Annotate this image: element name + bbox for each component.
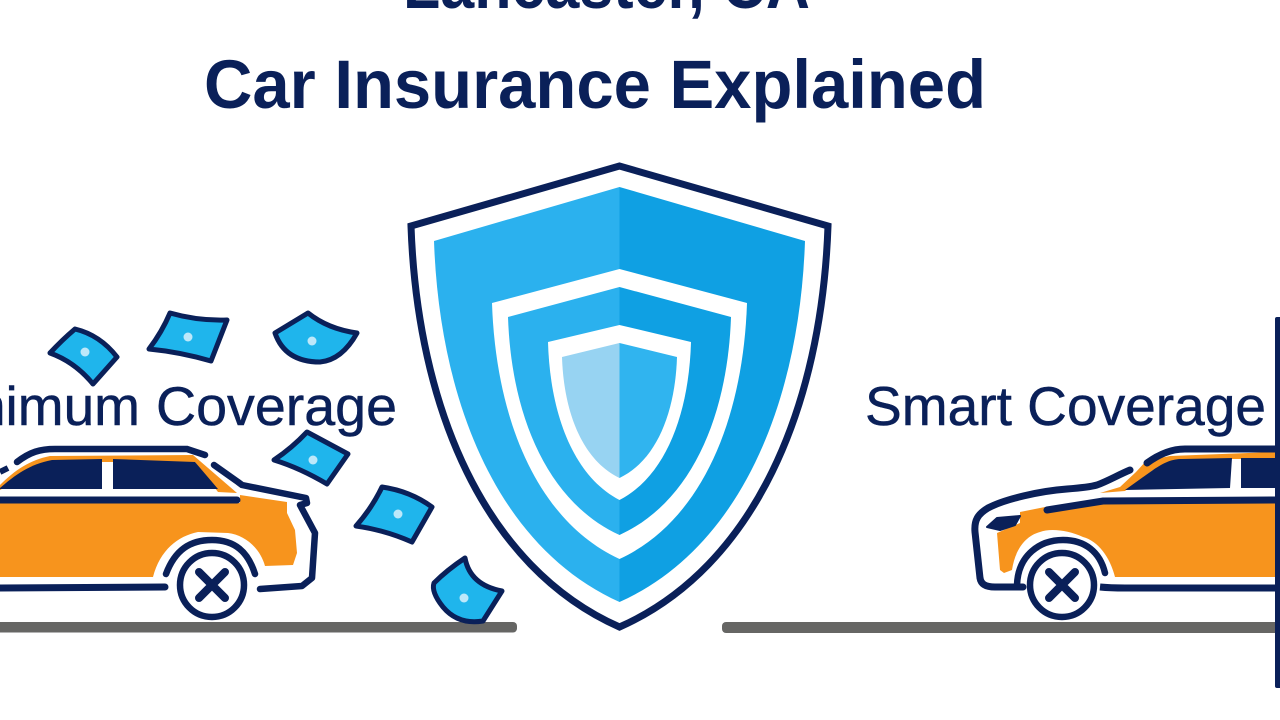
title: main heading: Car Insurance Explained [204, 46, 986, 123]
road left [0, 622, 517, 632]
label: smart coverage: Smart Coverage [865, 375, 1266, 437]
shield inner white ring [548, 325, 691, 500]
road right [722, 622, 1280, 633]
crumpled hood and front outline [214, 465, 315, 589]
front side window [1125, 458, 1232, 490]
bill 3 [275, 313, 357, 362]
belt line [0, 496, 237, 504]
wheel [180, 553, 244, 617]
belt line [1047, 500, 1275, 510]
roof outline [17, 449, 205, 462]
car body [997, 503, 1275, 577]
shield middle white ring [492, 269, 747, 559]
bill 5 [356, 487, 432, 542]
rear side window [0, 459, 102, 489]
icon: damaged orange car [0, 449, 315, 617]
roof trim [1100, 452, 1275, 493]
front side window [113, 459, 218, 489]
hood and nose outline [975, 470, 1130, 587]
label: minimum coverage: Coverage [156, 375, 397, 437]
shield core left [562, 343, 620, 478]
bill 1 [50, 329, 117, 384]
icon: layered shield [411, 166, 828, 627]
roof outline [1147, 449, 1275, 463]
roof edge stub [0, 468, 8, 472]
sill line [0, 587, 165, 588]
shield core right [620, 343, 677, 478]
bill 6 [433, 558, 502, 622]
rear side window [1241, 458, 1275, 488]
right edge bar [1275, 317, 1280, 688]
bill 4 [274, 432, 348, 484]
roof trim [0, 455, 237, 493]
wheel hub cross [199, 572, 225, 598]
flying money bills [50, 313, 502, 622]
shield outer band right [620, 187, 805, 602]
shield middle band left [508, 287, 620, 535]
wheel arch [1017, 540, 1105, 585]
shield outer outline [411, 166, 828, 627]
sill line [1100, 587, 1275, 588]
bill 2 [149, 313, 227, 361]
shield outer band left [434, 187, 620, 602]
headlight [987, 516, 1020, 530]
shield middle band right [620, 287, 731, 535]
car body [0, 495, 297, 577]
wheel hub cross [1049, 572, 1075, 598]
wheel arch [166, 540, 255, 574]
icon: smart coverage orange car [975, 449, 1275, 617]
wheel [1030, 553, 1094, 617]
